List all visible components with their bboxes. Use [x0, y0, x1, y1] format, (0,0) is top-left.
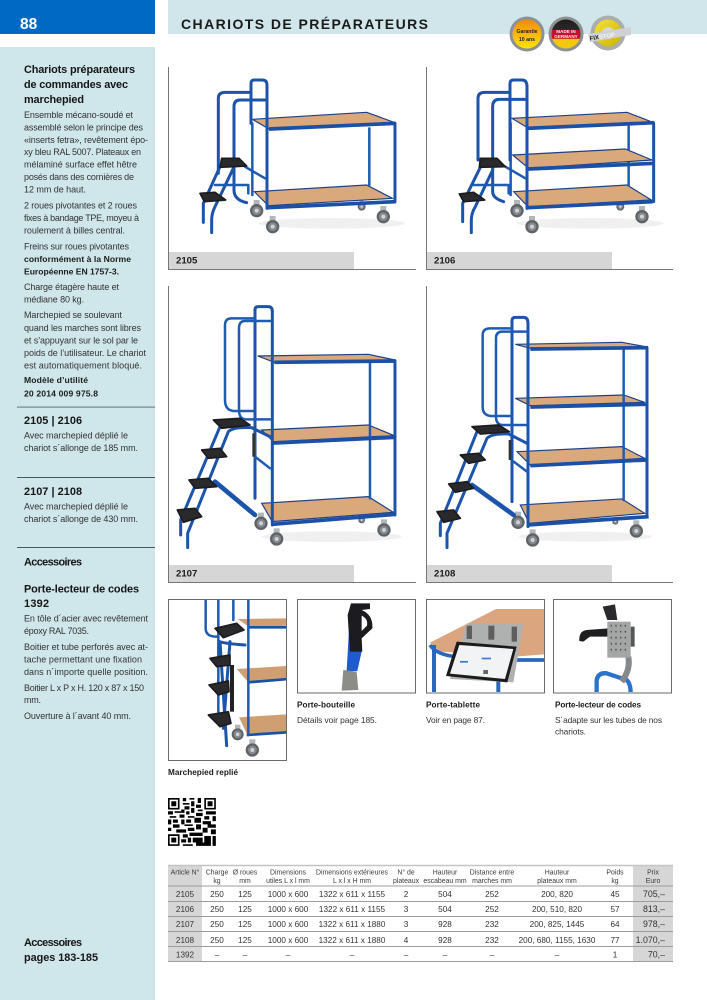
photo panel: code reader holder — [554, 600, 672, 693]
table header: kg — [213, 878, 221, 885]
accessory: code reader holder: mm. — [24, 695, 41, 705]
row 1392 — [176, 950, 665, 960]
cart illustration 2105 — [200, 80, 405, 233]
row 2108: 1.070,– — [636, 935, 665, 945]
badge: made in Germany: GERMANY — [554, 34, 578, 39]
row 2108: 2108 — [176, 936, 195, 945]
row 2107: 250 — [210, 920, 224, 929]
row 2108: 1322 x 611 x 1880 — [319, 936, 386, 945]
photo panel: bottle holder — [298, 600, 416, 693]
note: 2107 | 2108: 2107 | 2108 — [24, 486, 82, 498]
note: 2105 | 2106: Avec marchepied déplié le — [24, 431, 128, 441]
row 2106: 813,– — [643, 904, 665, 914]
accessory: code reader holder: époxy RAL 7035. — [24, 626, 89, 636]
caption: tablet holder: Voir en page 87. — [426, 715, 485, 725]
description text: poids de l’utilisateur. Le chariot — [24, 348, 146, 358]
row 2107: 978,– — [643, 919, 665, 929]
badge: guarantee 10 years: 10 ans — [519, 37, 535, 43]
accessories page reference: pages 183-185 — [24, 952, 98, 964]
row 2105: 1000 x 600 — [268, 890, 309, 899]
accessories heading: Accessoires — [24, 557, 82, 569]
row 2106: 3 — [404, 905, 409, 914]
row 2106: 252 — [485, 905, 499, 914]
label 2105: 2105 — [176, 256, 198, 266]
row 2108: 125 — [238, 936, 252, 945]
row 2107: 200, 825, 1445 — [530, 920, 585, 929]
row 2105: 1322 x 611 x 1155 — [319, 890, 386, 899]
row 1392: 1392 — [176, 950, 195, 960]
row 2106: 1000 x 600 — [268, 905, 309, 914]
row 2107: 3 — [404, 920, 409, 929]
table header: N° de — [397, 868, 415, 876]
description text: «inserts fetra», revêtement épo- — [24, 135, 148, 145]
description text: quand les marches sont libres — [24, 323, 142, 333]
row 2108 — [176, 935, 665, 945]
table header: utiles L x l mm — [266, 878, 310, 885]
row 2105: 705,– — [643, 889, 665, 899]
sidebar heading — [24, 64, 135, 106]
table header: Hauteur — [545, 870, 570, 876]
description text: est automatiquement bloqué. — [24, 360, 142, 370]
accessory: code reader holder — [24, 584, 148, 721]
row 1392: – — [215, 950, 220, 960]
badge: FIXSTOP — [588, 16, 631, 50]
accessory: code reader holder: Boitier et tube perforés avec at- — [24, 642, 148, 652]
caption: bottle holder: Porte-bouteille — [297, 701, 355, 710]
sidebar heading: de commandes avec — [24, 79, 128, 91]
badge: made in Germany: MADE IN — [556, 29, 576, 34]
caption: code reader holder: S´adapte sur les tubes de nos — [555, 715, 662, 725]
photo panel: folded step — [168, 598, 288, 760]
table header: kg — [611, 878, 619, 885]
table header — [171, 868, 660, 885]
row 1392: – — [243, 950, 248, 960]
sidebar panel — [0, 47, 155, 1000]
caption: tablet holder: Porte-tablette — [426, 701, 480, 710]
row 2107: 64 — [610, 920, 620, 929]
accessories page reference — [24, 937, 98, 964]
row 2105: 250 — [210, 890, 224, 899]
row 2108: 200, 680, 1155, 1630 — [519, 936, 596, 945]
note: 2105 | 2106: 2105 | 2106 — [24, 415, 82, 427]
description text: Ensemble mécano-soudé et — [24, 110, 133, 120]
row 2105: 45 — [610, 890, 620, 899]
caption: code reader holder: chariots. — [555, 726, 586, 736]
title band — [168, 0, 707, 34]
caption: code reader holder — [555, 701, 662, 736]
description text: médiane 80 kg. — [24, 295, 84, 305]
row 1392: – — [286, 950, 291, 960]
description text: mélaminé surface effet hêtre — [24, 160, 137, 170]
caption: bottle holder: Détails voir page 185. — [297, 715, 377, 725]
description text: fixes à bandage TPE, moyeu à — [24, 213, 139, 223]
page number tab — [0, 0, 155, 34]
table header: Poids — [606, 870, 624, 876]
note: 2105 | 2106: chariot s´allonge de 185 mm. — [24, 443, 138, 453]
table header: plateaux mm — [537, 878, 577, 885]
accessory: code reader holder: tache permettant une fixation — [24, 655, 142, 665]
accessory: code reader holder: dans n´importe quelle position. — [24, 667, 148, 677]
table header: Prix — [647, 870, 659, 876]
description text: roulement à billes central. — [24, 226, 125, 236]
row 2107: 928 — [438, 920, 452, 929]
row 2107: 1000 x 600 — [268, 920, 309, 929]
photo panel: tablet holder — [426, 600, 545, 693]
label 2108: 2108 — [434, 568, 456, 580]
product panel: 2107 — [168, 286, 416, 583]
badge: made in Germany — [548, 16, 584, 52]
table header: Charge — [206, 870, 228, 876]
description text: 12 mm de haut. — [24, 185, 86, 195]
table header: plateaux — [393, 878, 420, 885]
row 2106: 504 — [438, 905, 452, 914]
product panel: 2108 — [426, 286, 673, 583]
description text: Modèle d’utilité — [24, 375, 88, 385]
row 2105: 2 — [404, 890, 409, 899]
accessory: code reader holder: 1392 — [24, 598, 49, 610]
row 1392: – — [490, 950, 495, 960]
description text — [24, 110, 148, 398]
title band: CHARIOTS DE PRÉPARATEURS — [181, 16, 428, 32]
row 2105: 252 — [485, 890, 499, 899]
row 2105: 2105 — [176, 890, 195, 899]
row 2108: 77 — [610, 936, 620, 945]
row 2107 — [176, 919, 665, 929]
badge: guarantee 10 years — [510, 16, 544, 52]
row 2108: 928 — [438, 936, 452, 945]
product panel: 2106 — [426, 67, 673, 270]
table header: Ø roues — [233, 870, 258, 876]
label 2107: 2107 — [176, 568, 197, 580]
table header: Hauteur — [433, 870, 458, 876]
table header: Euro — [646, 878, 660, 885]
row 2108: 4 — [404, 936, 409, 945]
row 2105: 504 — [438, 890, 452, 899]
row 2108: 250 — [210, 936, 224, 945]
table header: Distance entre — [470, 870, 514, 876]
row 2108: 232 — [485, 936, 499, 945]
description text: posés dans des cornières de — [24, 172, 134, 182]
sidebar heading: marchepied — [24, 94, 84, 106]
product panel: 2105 — [168, 67, 416, 270]
row 2107: 232 — [485, 920, 499, 929]
row 2106: 250 — [210, 905, 224, 914]
accessory: code reader holder: Porte-lecteur de codes — [24, 584, 139, 596]
note: 2107 | 2108: Avec marchepied déplié le — [24, 502, 128, 512]
row 2106: 125 — [238, 905, 252, 914]
row 1392: – — [350, 950, 355, 960]
row 1392: – — [555, 950, 560, 960]
row 1392: 70,– — [648, 950, 665, 960]
specification table — [168, 866, 673, 962]
description text: Freins sur roues pivotantes — [24, 242, 130, 252]
description text: 20 2014 009 975.8 — [24, 388, 98, 398]
description text: Européenne EN 1757-3. — [24, 266, 119, 276]
table header: Dimensions — [270, 870, 307, 876]
accessories page reference: Accessoires — [24, 937, 82, 949]
row 2106: 2106 — [176, 905, 195, 914]
description text: Marchepied se soulevant — [24, 310, 122, 320]
accessory: code reader holder: Ouverture à l´avant 40 mm. — [24, 711, 131, 721]
description text: Charge étagère haute et — [24, 282, 119, 292]
table header: mm — [239, 878, 251, 885]
page number tab: 88 — [20, 16, 38, 33]
row 2108: 1000 x 600 — [268, 936, 309, 945]
table header: marches mm — [472, 878, 512, 885]
description text: assemblé selon le principe des — [24, 122, 144, 132]
badge: FIXSTOP: FIXSTOP — [589, 33, 616, 42]
note: 2107 | 2108 — [24, 486, 138, 524]
accessory: code reader holder: En tôle d´acier avec revêtement — [24, 614, 148, 624]
row 2105 — [176, 889, 665, 899]
row 2107: 2107 — [176, 920, 195, 929]
label 2106: 2106 — [434, 256, 455, 266]
cart illustration 2107 — [177, 307, 402, 548]
row 2106 — [176, 904, 665, 914]
row 2106: 200, 510, 820 — [532, 905, 582, 914]
row 2106: 1322 x 611 x 1155 — [319, 905, 386, 914]
sidebar heading: Chariots préparateurs — [24, 64, 135, 76]
row 1392: – — [404, 950, 409, 960]
caption: tablet holder — [426, 701, 485, 725]
cart illustration 2106 — [459, 80, 664, 233]
row 2106: 57 — [610, 905, 620, 914]
table header: escabeau mm — [423, 878, 467, 885]
row 1392: 1 — [613, 950, 618, 960]
QR code — [168, 798, 216, 846]
note: 2107 | 2108: chariot s´allonge de 430 mm. — [24, 514, 138, 524]
table header: Dimensions extérieures — [316, 870, 389, 876]
row 2105: 125 — [238, 890, 252, 899]
description text: 2 roues pivotantes et 2 roues — [24, 201, 138, 211]
caption: code reader holder: Porte-lecteur de codes — [555, 701, 641, 710]
description text: et s’appuyant sur le sol par le — [24, 336, 138, 346]
table header: L x l x H mm — [333, 878, 371, 885]
row 2107: 1322 x 611 x 1880 — [319, 920, 386, 929]
row 2105: 200, 820 — [541, 890, 573, 899]
cart illustration 2108 — [437, 317, 652, 548]
row 2107: 125 — [238, 920, 252, 929]
badge: guarantee 10 years: Garantie — [516, 29, 538, 35]
caption: folded step: Marchepied replié — [168, 768, 238, 777]
description text: xy bleu RAL 5007. Plateaux en — [24, 147, 141, 157]
table header: Article N° — [171, 868, 200, 876]
description text: conformément à la Norme — [24, 254, 131, 264]
note: 2105 | 2106 — [24, 415, 138, 453]
row 1392: – — [443, 950, 448, 960]
caption: bottle holder — [297, 701, 377, 725]
accessory: code reader holder: Boitier L x P x H. 120 x 87 x 150 — [24, 683, 144, 693]
